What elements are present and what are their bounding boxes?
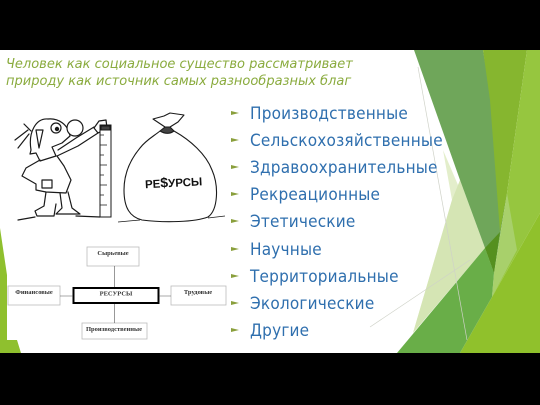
ruler: [100, 125, 111, 217]
cartoon person: [15, 119, 107, 220]
resources diagram: Производственные: [86, 326, 142, 333]
bullet list: Экологические: [250, 294, 374, 314]
bullet list: Научные: [250, 240, 322, 260]
resource sack: [118, 113, 225, 222]
bullet list: Сельскохозяйственные: [250, 130, 443, 150]
bullet list: Другие: [250, 320, 309, 340]
bullet list: [231, 104, 443, 340]
bullet list: Производственные: [250, 104, 408, 124]
resources diagram: РЕСУРСЫ: [100, 290, 133, 298]
slide panel: [0, 50, 540, 353]
resources diagram: Трудовые: [184, 289, 212, 296]
bullet list: Рекреационные: [250, 184, 380, 204]
title: [6, 57, 354, 89]
bullet list: Этетические: [250, 212, 356, 232]
title: природу как источник самых разнообразных благ: [6, 74, 351, 89]
resources diagram: Сырьевые: [97, 250, 129, 257]
resource sack: РЕ$УРСЫ: [145, 172, 203, 191]
bullet list: Территориальные: [250, 266, 399, 286]
bullet list: Здравоохранительные: [250, 158, 438, 178]
title: Человек как социальное существо рассматривает: [6, 57, 353, 72]
resources diagram: Финансовые: [15, 289, 53, 296]
resources diagram: [8, 247, 226, 339]
